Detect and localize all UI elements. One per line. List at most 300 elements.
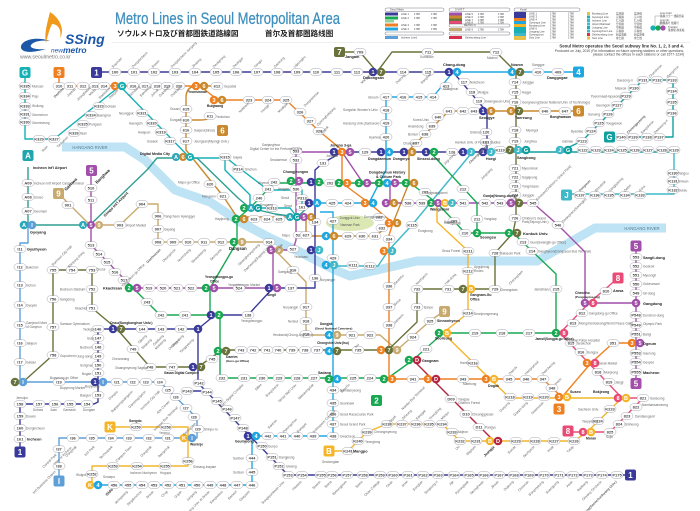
legend: line names list: 水仁線 <box>616 36 624 40</box>
rotated station names, lower rows: Ojeong <box>137 334 148 344</box>
minor station names: Ttukseom Park <box>499 252 521 256</box>
rotated station names, upper rows: Cheongpyeong <box>626 114 646 135</box>
transfer: Ogeum <box>628 339 644 347</box>
transfer: Sangbong: 7 <box>508 148 512 154</box>
minor station names: Anamdong <box>408 124 424 128</box>
rotated station names, upper rows: Bosan <box>151 59 161 69</box>
rotated station names, lower rows: Sangnoksu <box>209 490 224 505</box>
minor station names: Saetgang <box>278 270 292 274</box>
rotated station names, lower rows: Gaepo-dong <box>513 401 529 417</box>
stations: line 2: 212 <box>460 186 467 192</box>
stations: line 6: 647 <box>562 108 569 114</box>
rotated station names, upper rows: Gangchon <box>666 65 680 79</box>
transfer: Dongdaemun History & Culture Park: 4 <box>385 181 389 187</box>
minor station names: Myeongil <box>643 274 656 278</box>
major station names: Onsu(Sungkonghoe Univ.) <box>110 321 153 325</box>
stations: lines A, I, G, J, K, B, D: I35 <box>89 436 96 440</box>
stations: lines A, I, G, J, K, B, D: K132 <box>668 188 679 192</box>
minor station names: Hansung Univ.(Samseon) <box>343 122 379 126</box>
rotated station names, upper rows: Bumgye <box>296 422 308 434</box>
minor station names: Cheonggyesan <box>472 412 494 416</box>
rotated station names, lower rows: Sunae <box>507 445 517 455</box>
stations: lines A, I, G, J, K, B, D: I38 <box>56 464 63 468</box>
legend table: SMRT and others: LINE 7 <box>465 18 473 22</box>
legend: line names list: Incheon Line <box>592 18 607 22</box>
stations: lines A, I, G, J, K, B, D: K254 <box>132 464 143 468</box>
badge: line 5 west: 5 <box>89 166 94 176</box>
minor station names: Surisan <box>233 470 244 474</box>
minor station names: Jakjeon <box>26 342 37 346</box>
transfer: Gimpo Int'l Airport: 9 <box>97 223 101 229</box>
minor station names: Mapo <box>282 234 290 238</box>
rotated station names, upper rows: Yeongtong <box>428 406 442 421</box>
stations: line 7: 752 <box>89 286 96 292</box>
legend table: Korail: 1788 <box>568 20 574 24</box>
legend table: SMRT and others: S M R T <box>455 8 465 12</box>
minor station names: Dongguk Univ. <box>364 215 385 219</box>
minor station names: Shinpo-ro <box>204 428 218 432</box>
transfer: Yeouido <box>267 246 283 254</box>
transfer: Wangsimni: 2 <box>429 201 433 207</box>
major station names: Sangil-dong <box>643 256 666 260</box>
line B <box>329 203 622 451</box>
minor station names: Toegyewon <box>606 122 622 126</box>
stations: line 5: 545 <box>530 200 537 206</box>
stations: line 5: 517 <box>121 278 128 282</box>
transfer: City Hall <box>307 178 323 186</box>
minor station names: Churui <box>96 268 106 272</box>
stations: lines A, I, G, J, K, B, D: K224 <box>593 418 604 424</box>
legend: line names list: 水仁线 <box>634 36 642 40</box>
major station names: Seongsu <box>480 236 497 240</box>
stations: line 3: 327 <box>307 118 314 124</box>
stations: line 9: 903 <box>117 222 124 228</box>
stations: line 1: P157 <box>342 472 352 478</box>
stations: line 7: 757 <box>50 324 57 330</box>
badge: line 3: 3 <box>57 68 62 78</box>
major station names: Suseo <box>570 390 582 394</box>
stations: line 1: P162 <box>418 472 428 478</box>
operator note: Produced on July, 2010 (For information on future opening stations or other questions, <box>555 49 684 53</box>
stations: line 1: 101 <box>131 70 138 74</box>
transfer: Ichon <box>322 261 338 269</box>
rotated station names, lower rows: Nambu Bus Terminal <box>401 386 426 411</box>
minor station names: Seoul <box>284 204 292 208</box>
transfer: Dongdaemun: 4 <box>387 150 391 156</box>
minor station names: Taepyeong <box>582 420 598 424</box>
minor station names: Gongneung(Seoul National Univ. of Technology) <box>522 100 590 104</box>
stations: line 5: P553 <box>631 350 641 356</box>
minor station names: Kkachiul <box>75 306 87 310</box>
stations: lines A, I, G, J, K, B, D: K256 <box>183 458 194 464</box>
transfer: Taereung: 7 <box>517 109 521 115</box>
stations: line 1: P150 <box>257 444 267 448</box>
transfer: Hoegi: J <box>489 150 493 156</box>
transfer: Chang-dong: 4 <box>455 70 459 76</box>
stations: line 5: 521 <box>174 286 181 290</box>
stations: lines A, I, G, J, K, B, D: I24 <box>157 380 164 384</box>
legend table: Korail: 1788 <box>550 32 556 36</box>
major station names: Gyeyang <box>30 230 47 234</box>
stations: line 7: 740 <box>275 348 282 352</box>
minor station names: Sageun <box>444 220 455 224</box>
badge: A: A <box>25 152 31 160</box>
transfer: Seolleung: B <box>445 331 449 337</box>
transfer: Seoul Station <box>305 199 321 207</box>
transfer: Yeonsinnae: 6 <box>202 84 206 90</box>
major station names: Sadang <box>318 371 331 375</box>
stations: lines A, I, G, J, K, B, D: P135 <box>667 100 677 104</box>
minor station names: Wolgot <box>76 473 86 477</box>
legend table: Korail <box>514 8 580 40</box>
stations: line 4: 427 <box>330 218 337 224</box>
rotated station names, upper rows: Pyeongchon <box>282 417 298 434</box>
stations: line 1: 104 <box>192 70 199 74</box>
minor station names: Seodaemun <box>270 158 287 162</box>
rotated station names, upper rows: Ganeung <box>273 56 286 69</box>
minor station names: Geumchon <box>32 113 48 117</box>
minor station names: Yeongdeungpo Market <box>228 283 260 287</box>
legend: fare tables and line key <box>385 8 685 40</box>
minor station names: Gireum <box>368 96 379 100</box>
minor station names: Myeonmok <box>522 166 538 170</box>
stations: lines A, I, G, J, K, B, D: K218 <box>505 394 516 400</box>
rotated station names, lower rows: Omokgyo <box>168 338 181 351</box>
minor station names: Hanti <box>460 361 468 365</box>
legend table: Korail: LINE 6 <box>529 26 537 30</box>
transfer: Gimpo Int'l Airport <box>79 221 103 229</box>
stations: lines A, I, G, J, K, B, D: K323 <box>94 104 105 108</box>
stations: lines A, I, G, J, K, B, D: K229 <box>511 438 522 444</box>
minor station names: Namtaeryeong <box>340 388 361 392</box>
stations: line 7: 714 <box>512 80 519 84</box>
stations: line 1: P147 <box>230 416 240 420</box>
minor station names: Yeongdeungpo <box>241 319 263 323</box>
stations: lines A, I, G, J, K, B, D: K326 <box>69 130 80 136</box>
rotated station names, upper rows: Gupabal <box>158 86 170 98</box>
minor station names: Guui(Gwangjin-gu Office) <box>530 240 566 244</box>
legend: symbol key: 路線番号 线路号 <box>660 21 679 25</box>
stations: line 7: 741 <box>264 348 271 352</box>
minor station names: Hogupo <box>160 471 171 475</box>
transfer: Chongshin Univ.: 4 <box>327 349 331 355</box>
legend table: Korail: 1788 <box>568 12 574 16</box>
minor station names: Yangcheon Hyanggyo <box>164 214 195 218</box>
stations: line 3: 338 <box>386 322 393 328</box>
stations: line 5: 510 <box>88 186 95 190</box>
stations: line 7: 755 <box>50 268 57 272</box>
legend table: Korail: 1788 <box>550 26 556 30</box>
rotated station names, upper rows: Jichuk <box>150 88 160 98</box>
badge: K: K <box>107 423 113 432</box>
transfer: Guro: 1 <box>196 327 200 333</box>
stations: line 7: 751 <box>89 306 96 310</box>
stations: line 9: 916 <box>290 268 297 272</box>
transfer: Chungmuro: 4 <box>371 201 375 207</box>
rotated station names, upper rows: Geumho <box>393 274 405 286</box>
major station names: Gasan Digital Complex <box>164 371 199 375</box>
minor station names: Byeollae <box>571 130 583 134</box>
stations: line 5: 532 <box>293 158 300 162</box>
badge: J <box>561 190 572 200</box>
rotated station names, lower rows: Int'l Business District <box>32 470 57 495</box>
stations: line 8 <box>565 288 649 435</box>
stations: lines A, I, G, J, K, B, D: P136 <box>667 110 677 116</box>
rotated station names, lower rows: Sillim <box>254 383 263 391</box>
stations: line 2: 202 <box>327 180 334 186</box>
stations: line 4 <box>108 69 564 488</box>
transfer: Dangsan: 9 <box>240 240 244 246</box>
transfer: Dangsan <box>230 238 246 246</box>
stations: line 4: 453 <box>151 482 158 488</box>
stations: line 5: 527 <box>290 246 297 252</box>
legend table: Korail: 1788 <box>568 32 574 36</box>
rotated station names, upper rows: Oebin <box>623 183 632 193</box>
transfer: Geumjeong: 4 <box>254 434 258 440</box>
major station names: Chongshin Univ.(Isu) <box>317 341 349 345</box>
minor station names: Goksan <box>105 104 116 108</box>
stations: lines A, I, G, J, K, B, D: K212 <box>463 268 474 274</box>
stations: line 5: 522 <box>188 286 195 290</box>
transfer: Yeongdeungpo-gu Office <box>202 284 218 292</box>
logo: SSing <box>65 31 105 47</box>
legend table: SMRT and others <box>449 8 510 40</box>
legend: line names list: 盆唐线 <box>634 12 642 16</box>
stations: lines A, I, G, J, K, B, D: 161 <box>299 204 306 210</box>
major station names: Kkachisan <box>103 286 123 290</box>
rotated station names, lower rows: Gaehwasan <box>146 248 162 264</box>
transfer: Sangbong <box>506 146 530 154</box>
major station names: Taereung <box>515 116 532 120</box>
stations: line 1: 108 <box>274 70 281 74</box>
minor station names: Gacheon Univ. <box>578 408 599 412</box>
legend table: SMRT and others: 1798 <box>498 12 504 16</box>
legend: line names list: 空港線 <box>616 22 624 26</box>
rotated station names, lower rows: Semo <box>355 480 364 489</box>
minor station names: Galsan <box>26 360 36 364</box>
rotated station names, upper rows: Achasan(Children's Grand Park) <box>535 164 572 202</box>
legend table: Korail: Suin Line <box>529 36 540 40</box>
park: Dongguk Univ. <box>326 215 374 231</box>
transfer: Dongmyo <box>400 148 416 156</box>
stations: lines A, I, G, J, K, B, D: I36 <box>70 436 77 440</box>
stations: line 5: 549 <box>633 290 640 296</box>
badge: line 7 north: 7 <box>337 48 342 57</box>
transfer: Seongsu: 2 <box>475 231 479 237</box>
transfer: Wangsimni: J <box>450 201 454 207</box>
legend: symbol key: 路線カラー 线路色彩 <box>660 14 684 18</box>
transfer: Nowon: 4 <box>510 70 514 76</box>
rotated station names, lower rows: Singilonchon <box>126 490 143 506</box>
rotated station names, lower rows: Cheonan <box>517 480 530 492</box>
transfer: Yaksu: 3 <box>387 221 391 227</box>
stations: lines A, I, G, J, K, B, D: P133 <box>667 78 677 82</box>
minor station names: Bakchon <box>26 266 39 270</box>
minor station names: Noryangjin <box>320 278 335 282</box>
stations: line 6: 612 <box>214 84 221 88</box>
transfer: Dobongsan: 1 <box>371 70 375 76</box>
stations: line 1: P154 <box>297 472 307 478</box>
rotated station names, upper rows <box>41 41 680 434</box>
rotated station names, lower rows: Central Park <box>42 453 58 469</box>
transfer: Dogok <box>482 375 498 383</box>
stations: lines A, I, G, J, K, B, D: I31 <box>165 436 172 440</box>
stations: line 3: 313 <box>92 84 99 88</box>
minor station names: Samsan Gymnasium <box>60 322 90 326</box>
legend: line names list: Gyeongchun Line <box>592 29 613 33</box>
rotated station names, upper rows: Cheongnyangni <box>468 144 489 165</box>
line 4 <box>94 72 579 485</box>
stations: line 1: 144 <box>139 326 146 332</box>
major station names: Seokgye <box>479 116 495 120</box>
minor station names: Bupyeong <box>85 384 100 388</box>
rotated station names, lower rows: Int'l Park <box>84 445 96 457</box>
transfer: Kkachisan <box>125 284 141 292</box>
rotated station names, lower rows: Ansan <box>145 490 155 500</box>
transfer: Sindorim <box>207 311 223 319</box>
legend table: Seoul Metro: LINE 1 <box>401 12 409 16</box>
rotated station names, lower rows: Ssangyong <box>545 480 560 495</box>
transfer: Yaksu: 6 <box>395 221 399 227</box>
stations: line 1: P167 <box>494 472 504 478</box>
rotated station names, lower rows: Incheon Bus Terminal <box>153 406 179 432</box>
stations: line 9: 906 <box>155 214 162 218</box>
badge: line 9: 9 <box>56 190 61 198</box>
minor station names: Cheongdam <box>500 288 518 292</box>
legend table: SMRT and others: 1798 <box>498 20 504 24</box>
rotated station names, lower rows: Dujeong <box>503 480 515 492</box>
stations: line 7: 722 <box>512 174 519 180</box>
stations: lines A, I, G, J, K, B, D: K211 <box>463 248 473 254</box>
rotated station names, lower rows: Pyeongtaek <box>454 480 470 495</box>
transfer: Yongsan: 1 <box>309 248 313 254</box>
lines G and P east <box>487 80 674 152</box>
stations: lines A, I, G, J, K, B, D: I34 <box>108 436 115 440</box>
stations: line 1: 119 <box>476 98 483 104</box>
legend: line names list: Jungang Line <box>592 26 608 30</box>
transfer: Hapjeong <box>232 215 248 223</box>
stations: lines A, I, G, J, K, B, D: A07 <box>24 208 32 214</box>
transfer: Gangdong: 5 <box>634 301 638 307</box>
legend: line names list: Suin Line <box>592 36 603 40</box>
stations: lines A, I, G, J, K, B, D: K313 <box>267 206 278 210</box>
stations: line 1: 107 <box>254 70 261 74</box>
minor station names: Gaerong <box>643 352 656 356</box>
stations: lines A, I, G, J, K, B, D: K129 <box>669 148 680 152</box>
rotated station names, upper rows: Sangcheon <box>640 120 655 135</box>
transfer: Cheonho: 8 <box>591 301 595 307</box>
transfer: Ichon: J <box>332 263 336 269</box>
transfer: Cheonggu area: 5 <box>384 201 388 207</box>
stations: lines A, I, G, J, K, B, D: A08 <box>24 194 32 200</box>
transfer: Hoegi <box>479 148 495 156</box>
stations: lines A, I, G, J, K, B, D: I13 <box>17 282 24 288</box>
minor station names: Gangbyeon(Dongseoul Bus Terminal) <box>538 250 591 254</box>
stations: line 2: 241 <box>182 312 189 318</box>
minor station names: Sangdong <box>60 298 75 302</box>
transfer: Chungmuro: 3 <box>363 201 367 207</box>
stations: line 2: 231 <box>241 376 248 380</box>
stations: lines A, I, G, J, K, B, D: P123 <box>577 138 587 144</box>
stations: line 4: 410 <box>535 70 542 74</box>
stations: line 7: 715 <box>512 90 519 94</box>
stations: line 4: 449 <box>207 482 214 488</box>
minor station names: Yangsu <box>678 172 689 176</box>
line K <box>92 427 188 485</box>
stations: line 9: 921 <box>349 332 356 338</box>
minor station names: Suraksan <box>420 55 434 59</box>
rotated station names, upper rows: Bucheon City Hall <box>51 245 73 267</box>
transfer: Jeongja: B <box>488 439 492 445</box>
stations: line 1: P159 <box>375 472 385 478</box>
major station names: Chungjeongno <box>283 170 309 174</box>
transfer: Express Bus Terminal: 7 <box>387 348 391 354</box>
stations: line 2: 230 <box>259 376 266 380</box>
line 3 <box>59 72 636 397</box>
stations: line 6: 627 <box>303 232 310 238</box>
major station names: Oido <box>105 487 114 497</box>
minor station names: Susaek <box>147 140 158 144</box>
minor station names: Juan <box>50 408 57 412</box>
stations: lines A, I, G, J, K, B, D: I22 <box>130 380 137 384</box>
transfer: Sinseol-dong: 1 <box>424 150 428 156</box>
stations: line 3: 341 <box>410 376 417 382</box>
transfer: Yeongdeungpo-gu Office: 2 <box>204 286 208 292</box>
minor station names: Olympic Park <box>643 322 662 326</box>
stations: line 7: 712 <box>493 50 500 54</box>
stations: lines A, I, G, J, K, B, D: P125 <box>594 120 604 126</box>
badge: G west: G <box>22 68 28 78</box>
stations: lines A, I, G, J, K, B, D: K112 <box>365 264 375 268</box>
minor station names: Hwajeon <box>138 130 151 134</box>
stations: line 2: 215 <box>553 286 560 292</box>
minor station names: Geomam <box>34 210 47 214</box>
minor station names: Seogang <box>260 203 273 207</box>
major station names <box>27 55 666 497</box>
stations: line 3: 314 <box>101 84 108 88</box>
rotated station names, upper rows: Anguk <box>320 125 330 135</box>
stations: line 4: 444 <box>249 456 256 460</box>
transfer: Express Bus Terminal: 3 <box>379 348 383 354</box>
rotated station names, lower rows: Yatap <box>566 445 575 454</box>
rotated station names, lower rows: Suwon <box>312 480 322 490</box>
transfer: Gangnam: 2 <box>407 358 411 364</box>
rotated station names, upper rows: Jegi-dong <box>443 152 456 166</box>
major station names: Gyulhyeon <box>27 248 47 252</box>
minor station names: Eungbong <box>418 229 433 233</box>
transfer: Hongik Univ.: 2 <box>242 206 246 212</box>
legend table: Korail: 1788 <box>568 36 574 40</box>
transfer: Gangnam: D <box>415 358 419 364</box>
stations: line 1: 147 <box>95 336 102 340</box>
stations: line 9: 917 <box>303 304 310 310</box>
stations: line 4: 409 <box>555 70 562 74</box>
transfer: Gangdong <box>632 299 640 307</box>
rotated station names, upper rows: Yongmun <box>578 179 592 193</box>
transfer: Garak Market <box>583 359 599 367</box>
transfer: Chungjeongno <box>287 177 303 185</box>
legend table: SMRT and others: 1798 <box>498 28 504 32</box>
stations: line 3: 337 <box>386 304 393 310</box>
legend table: SMRT and others: METRO 9 <box>464 23 476 27</box>
stations: line 7: 738 <box>302 348 309 352</box>
stations: line 3: 326 <box>297 110 304 114</box>
minor station names: Korea Univ. <box>413 118 430 122</box>
stations: lines A, I, G, J, K, B, D: K324 <box>86 112 97 118</box>
legend: line names list: Gyeongui Line <box>592 15 609 19</box>
stations: lines A, I, G, J, K, B, D: K226 <box>569 438 580 444</box>
stations: line 4: 447 <box>234 482 241 488</box>
